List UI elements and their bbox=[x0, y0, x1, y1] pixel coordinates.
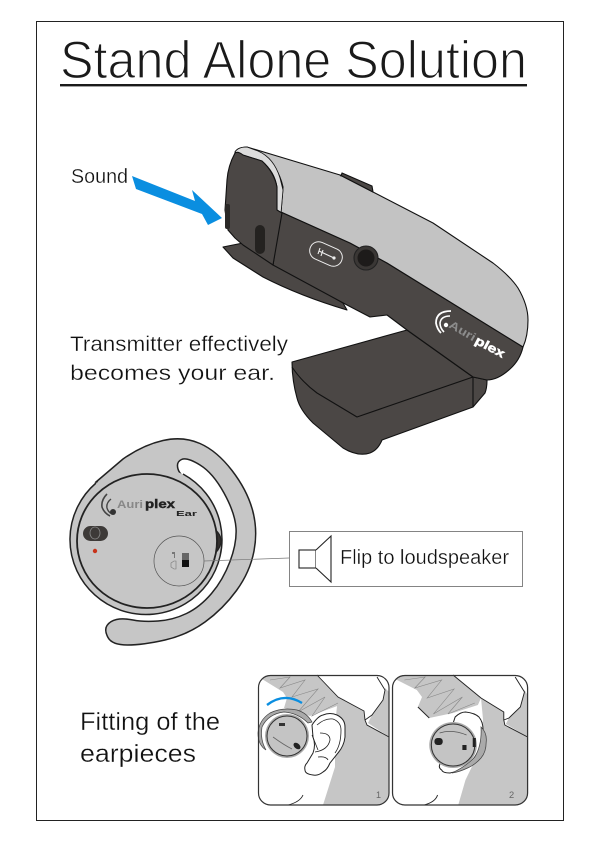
illustration: earpiece bbox=[70, 439, 256, 645]
step 2 neck wedge bbox=[506, 690, 528, 737]
text: transmitter caption bbox=[70, 332, 288, 385]
earpiece logo: Auri bbox=[117, 499, 143, 511]
device sound inlet bbox=[225, 204, 230, 229]
callout: flip to loudspeaker: Flip to loudspeaker bbox=[340, 547, 509, 569]
step 1 neck wedge bbox=[368, 688, 389, 737]
device base bbox=[292, 330, 487, 454]
earpiece logo: plex bbox=[145, 499, 176, 511]
earpiece red LED bbox=[93, 549, 97, 553]
device switch badge bbox=[307, 239, 345, 269]
earpiece logo: Ear bbox=[176, 509, 197, 518]
step 2 jaw line bbox=[424, 795, 438, 805]
panel: fitting step 1 bbox=[258, 675, 389, 805]
device clip bbox=[223, 243, 347, 310]
step 2 collar bbox=[395, 675, 481, 718]
device slot bbox=[255, 225, 265, 254]
step 2 frame bbox=[393, 676, 528, 805]
step 1 blue arrow bbox=[267, 698, 302, 705]
step 1 jaw line bbox=[288, 795, 303, 805]
icon: loudspeaker bbox=[299, 536, 331, 582]
text: transmitter caption: Transmitter effectively bbox=[70, 332, 288, 356]
device front rim bbox=[235, 147, 283, 213]
step 2 number: 2 bbox=[509, 790, 514, 800]
step 1 outlines bbox=[317, 675, 389, 737]
arrow: sound direction bbox=[132, 176, 222, 225]
device dark body band bbox=[273, 212, 523, 380]
device logo: Auri bbox=[446, 319, 478, 344]
earpiece disc bbox=[77, 474, 217, 608]
earpiece ring bbox=[70, 465, 222, 615]
step 1 earpiece bbox=[258, 709, 312, 758]
step 1 collar bbox=[262, 675, 345, 716]
text: fitting of the earpieces: earpieces bbox=[80, 740, 196, 768]
step 2 outlines bbox=[418, 675, 528, 737]
illustration: transmitter device bbox=[223, 147, 528, 454]
earpiece dark wheel bbox=[212, 527, 221, 556]
step 1 ear bbox=[305, 714, 345, 775]
leader line bbox=[204, 558, 289, 561]
step 2 earpiece bbox=[429, 722, 486, 773]
label: Sound: Sound bbox=[71, 166, 128, 188]
callout: flip to loudspeaker bbox=[290, 532, 522, 586]
text: transmitter caption: becomes your ear. bbox=[70, 361, 275, 385]
text: fitting of the earpieces bbox=[80, 708, 220, 768]
step 1 torso shading bbox=[323, 697, 389, 805]
device front face bbox=[225, 152, 282, 265]
earpiece logo bbox=[102, 494, 197, 518]
earpiece button bbox=[83, 526, 108, 541]
device jack bbox=[354, 246, 378, 270]
step 1 frame bbox=[258, 676, 389, 805]
earpiece switch callout circle bbox=[154, 536, 204, 586]
device silver top bbox=[235, 147, 528, 347]
text: fitting of the earpieces: Fitting of the bbox=[80, 708, 220, 736]
earpiece switch bbox=[171, 552, 189, 569]
step 2 ear bbox=[439, 712, 483, 773]
title: Stand Alone Solution bbox=[60, 31, 527, 90]
device top button bbox=[340, 173, 373, 192]
earpiece hook body bbox=[96, 439, 256, 645]
device logo: plex bbox=[473, 333, 508, 361]
step 1 number: 1 bbox=[376, 790, 381, 800]
device logo bbox=[436, 311, 508, 361]
panel: fitting step 2 bbox=[393, 675, 528, 805]
step 2 torso shading bbox=[458, 698, 528, 805]
